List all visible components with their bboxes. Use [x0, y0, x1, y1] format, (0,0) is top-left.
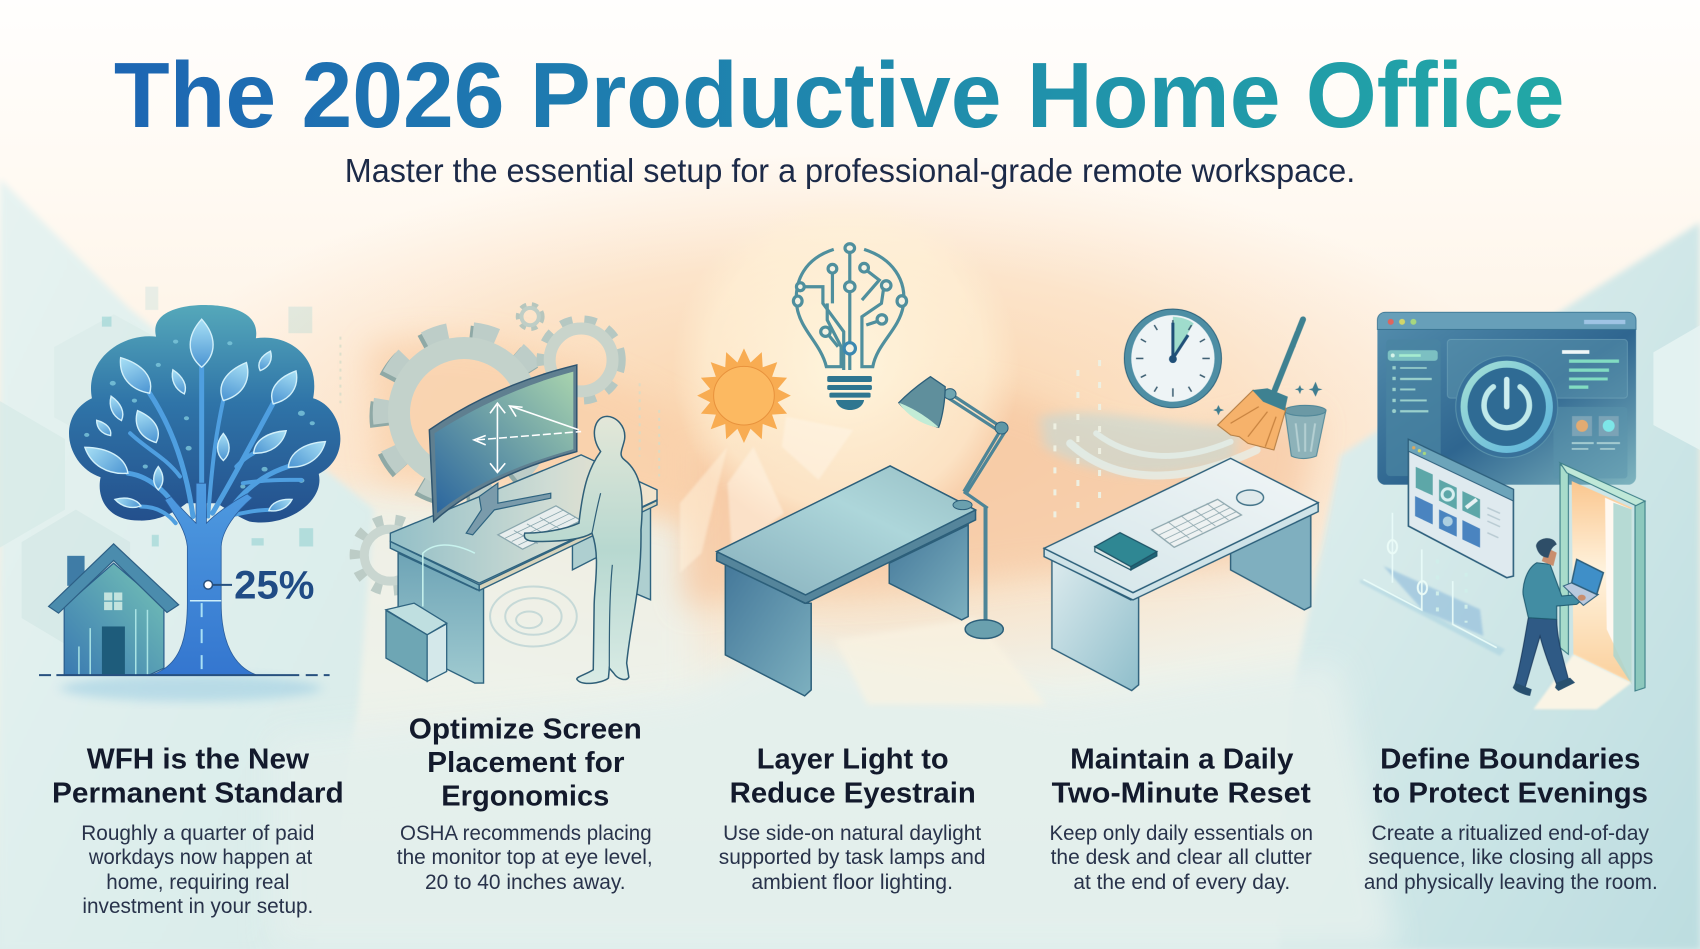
tree crown [69, 305, 340, 523]
monitor stand [466, 483, 551, 535]
floor lamp [899, 377, 1008, 639]
body: supported by task lamps and [719, 846, 986, 869]
text block: layer light [719, 744, 986, 894]
icon: broom [1218, 319, 1303, 450]
body [719, 822, 986, 894]
house [49, 544, 179, 675]
body [1049, 822, 1313, 894]
icon: sparkles [1213, 382, 1322, 415]
floating squares [102, 287, 313, 547]
monitor [429, 365, 577, 522]
body [397, 822, 653, 894]
heading: Two-Minute Reset [1052, 777, 1311, 809]
body: 20 to 40 inches away. [425, 871, 626, 894]
icon: trash bin [1284, 405, 1326, 458]
cable [423, 545, 475, 606]
ground line [56, 674, 299, 676]
body: sequence, like closing all apps [1368, 846, 1653, 869]
open door [1533, 463, 1645, 709]
panels [1447, 339, 1627, 398]
body: the monitor top at eye level, [397, 846, 653, 869]
text block: boundaries [1364, 744, 1658, 894]
icon: clock [1124, 309, 1221, 408]
heading: Permanent Standard [52, 777, 344, 809]
heading: Placement for [427, 747, 624, 779]
keyboard [1152, 499, 1241, 547]
body: home, requiring real [106, 871, 289, 894]
body: OSHA recommends placing [400, 822, 652, 845]
book [1095, 533, 1157, 570]
body: Create a ritualized end-of-day [1371, 822, 1649, 845]
panel: daily reset illustration [1040, 309, 1326, 691]
body: and physically leaving the room. [1364, 871, 1658, 894]
icon: power button [1456, 356, 1558, 458]
desk [717, 466, 976, 696]
teal haze behind desk [1040, 413, 1239, 475]
icon: sun [697, 348, 791, 443]
panel: ergonomic screen placement illustration [340, 305, 659, 683]
body: at the end of every day. [1073, 871, 1290, 894]
app launcher window [1408, 439, 1513, 578]
heading: Optimize Screen [409, 713, 642, 745]
measurement arrows [474, 403, 581, 473]
heading: Reduce Eyestrain [730, 777, 976, 809]
tree branches [128, 367, 301, 537]
computer tower [386, 603, 447, 681]
body: Keep only daily essentials on [1049, 822, 1313, 845]
text block: daily reset [1049, 744, 1313, 894]
body: Use side-on natural daylight [723, 822, 981, 845]
tree trunk [152, 483, 256, 675]
body: ambient floor lighting. [751, 871, 953, 894]
body: workdays now happen at [88, 846, 312, 869]
person detail lines [592, 493, 612, 668]
heading: Layer Light to [757, 744, 949, 776]
heading [409, 713, 642, 813]
sunbeams [680, 417, 853, 573]
tree leaves [78, 319, 332, 514]
ground line dashes [39, 674, 330, 676]
heading: to Protect Evenings [1373, 777, 1648, 809]
panel: tree and house illustration [39, 287, 340, 701]
person with laptop [1513, 538, 1603, 696]
app window large [1377, 312, 1636, 485]
monitor screen [435, 372, 573, 513]
trunk circuit line [201, 603, 203, 670]
desk [1044, 458, 1318, 691]
text block: screen placement [397, 713, 653, 894]
panel: layered light illustration [680, 244, 1008, 696]
keyboard [498, 506, 581, 549]
heading [1052, 744, 1311, 809]
heading: Ergonomics [441, 781, 609, 813]
icon: gears [356, 305, 621, 590]
body: investment in your setup. [82, 895, 313, 918]
stat: 25%: 25% [234, 563, 314, 607]
rug swirl [490, 586, 577, 646]
title: The 2026 Productive Home Office [114, 43, 1564, 147]
panel: boundaries illustration [1360, 312, 1645, 709]
sidebar [1386, 339, 1441, 476]
tree circuit dots [84, 340, 315, 489]
heading [1373, 744, 1648, 809]
body [81, 822, 314, 918]
heading: Maintain a Daily [1070, 744, 1293, 776]
data streams [1055, 360, 1100, 523]
body: Roughly a quarter of paid [81, 822, 314, 845]
ground shadow [61, 675, 321, 701]
heading [52, 744, 344, 809]
mouse [1237, 490, 1264, 505]
motion swoosh [1070, 433, 1257, 476]
heading: Define Boundaries [1380, 744, 1640, 776]
standing desk [390, 455, 657, 683]
heading: WFH is the New [87, 744, 310, 776]
circuit floor [1360, 513, 1505, 656]
data streams [340, 337, 659, 477]
person silhouette [524, 416, 642, 683]
stat marker [190, 580, 232, 601]
subtitle: Master the essential setup for a professional-grade remote workspace. [345, 153, 1355, 190]
icon: circuit lightbulb [793, 244, 907, 370]
bulb base [827, 376, 872, 410]
body [1364, 822, 1658, 894]
heading [730, 744, 976, 809]
body: the desk and clear all clutter [1051, 846, 1312, 869]
text block: WFH standard [52, 744, 344, 918]
